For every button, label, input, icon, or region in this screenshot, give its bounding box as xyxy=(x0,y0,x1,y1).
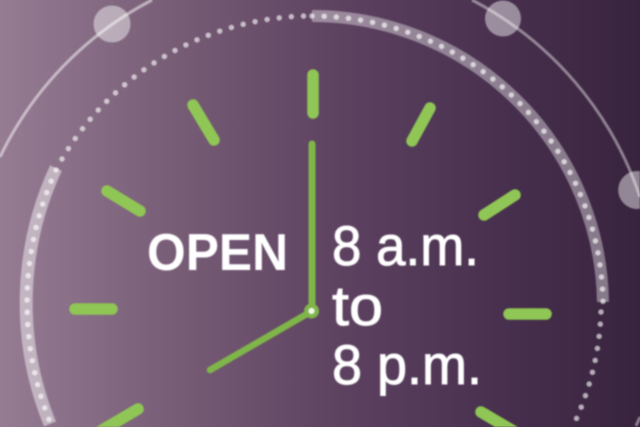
clock hands xyxy=(210,144,319,370)
center pivot xyxy=(304,304,319,318)
closing time: 8 p.m. xyxy=(332,333,482,396)
marker: top right xyxy=(485,0,521,36)
hours text xyxy=(332,214,482,396)
opening time: 8 a.m. xyxy=(332,214,479,277)
word: to: to xyxy=(332,274,383,337)
open-hours band: upper right xyxy=(312,16,603,302)
dotted arc: closed hours lower right xyxy=(574,312,601,424)
open-hours dots: left xyxy=(27,170,56,422)
open-hours band: left xyxy=(26,168,56,424)
outer ring: upper right arc xyxy=(472,0,640,197)
outer ring: lower right arc xyxy=(636,417,640,426)
pivot highlight xyxy=(308,308,314,314)
tick: 2 xyxy=(484,195,515,215)
tick: 12 xyxy=(307,75,319,113)
tick: 9 xyxy=(75,303,112,315)
hour hand xyxy=(210,311,312,370)
marker: right xyxy=(618,171,640,209)
tick: 8 xyxy=(96,403,144,427)
tick: 1 xyxy=(412,108,430,141)
tick: 4 xyxy=(475,406,518,427)
dotted arc: closed hours upper left xyxy=(62,16,305,159)
open-hours dots: upper right xyxy=(312,16,603,302)
tick: 3 xyxy=(509,308,546,320)
minute hand xyxy=(308,144,316,311)
tick: 11 xyxy=(193,105,214,140)
hour tick marks xyxy=(75,75,546,427)
label: OPEN: OPEN xyxy=(147,224,288,282)
outer ring: upper left arc xyxy=(0,0,152,157)
marker: top left xyxy=(94,6,130,42)
tick: 10 xyxy=(107,191,140,211)
